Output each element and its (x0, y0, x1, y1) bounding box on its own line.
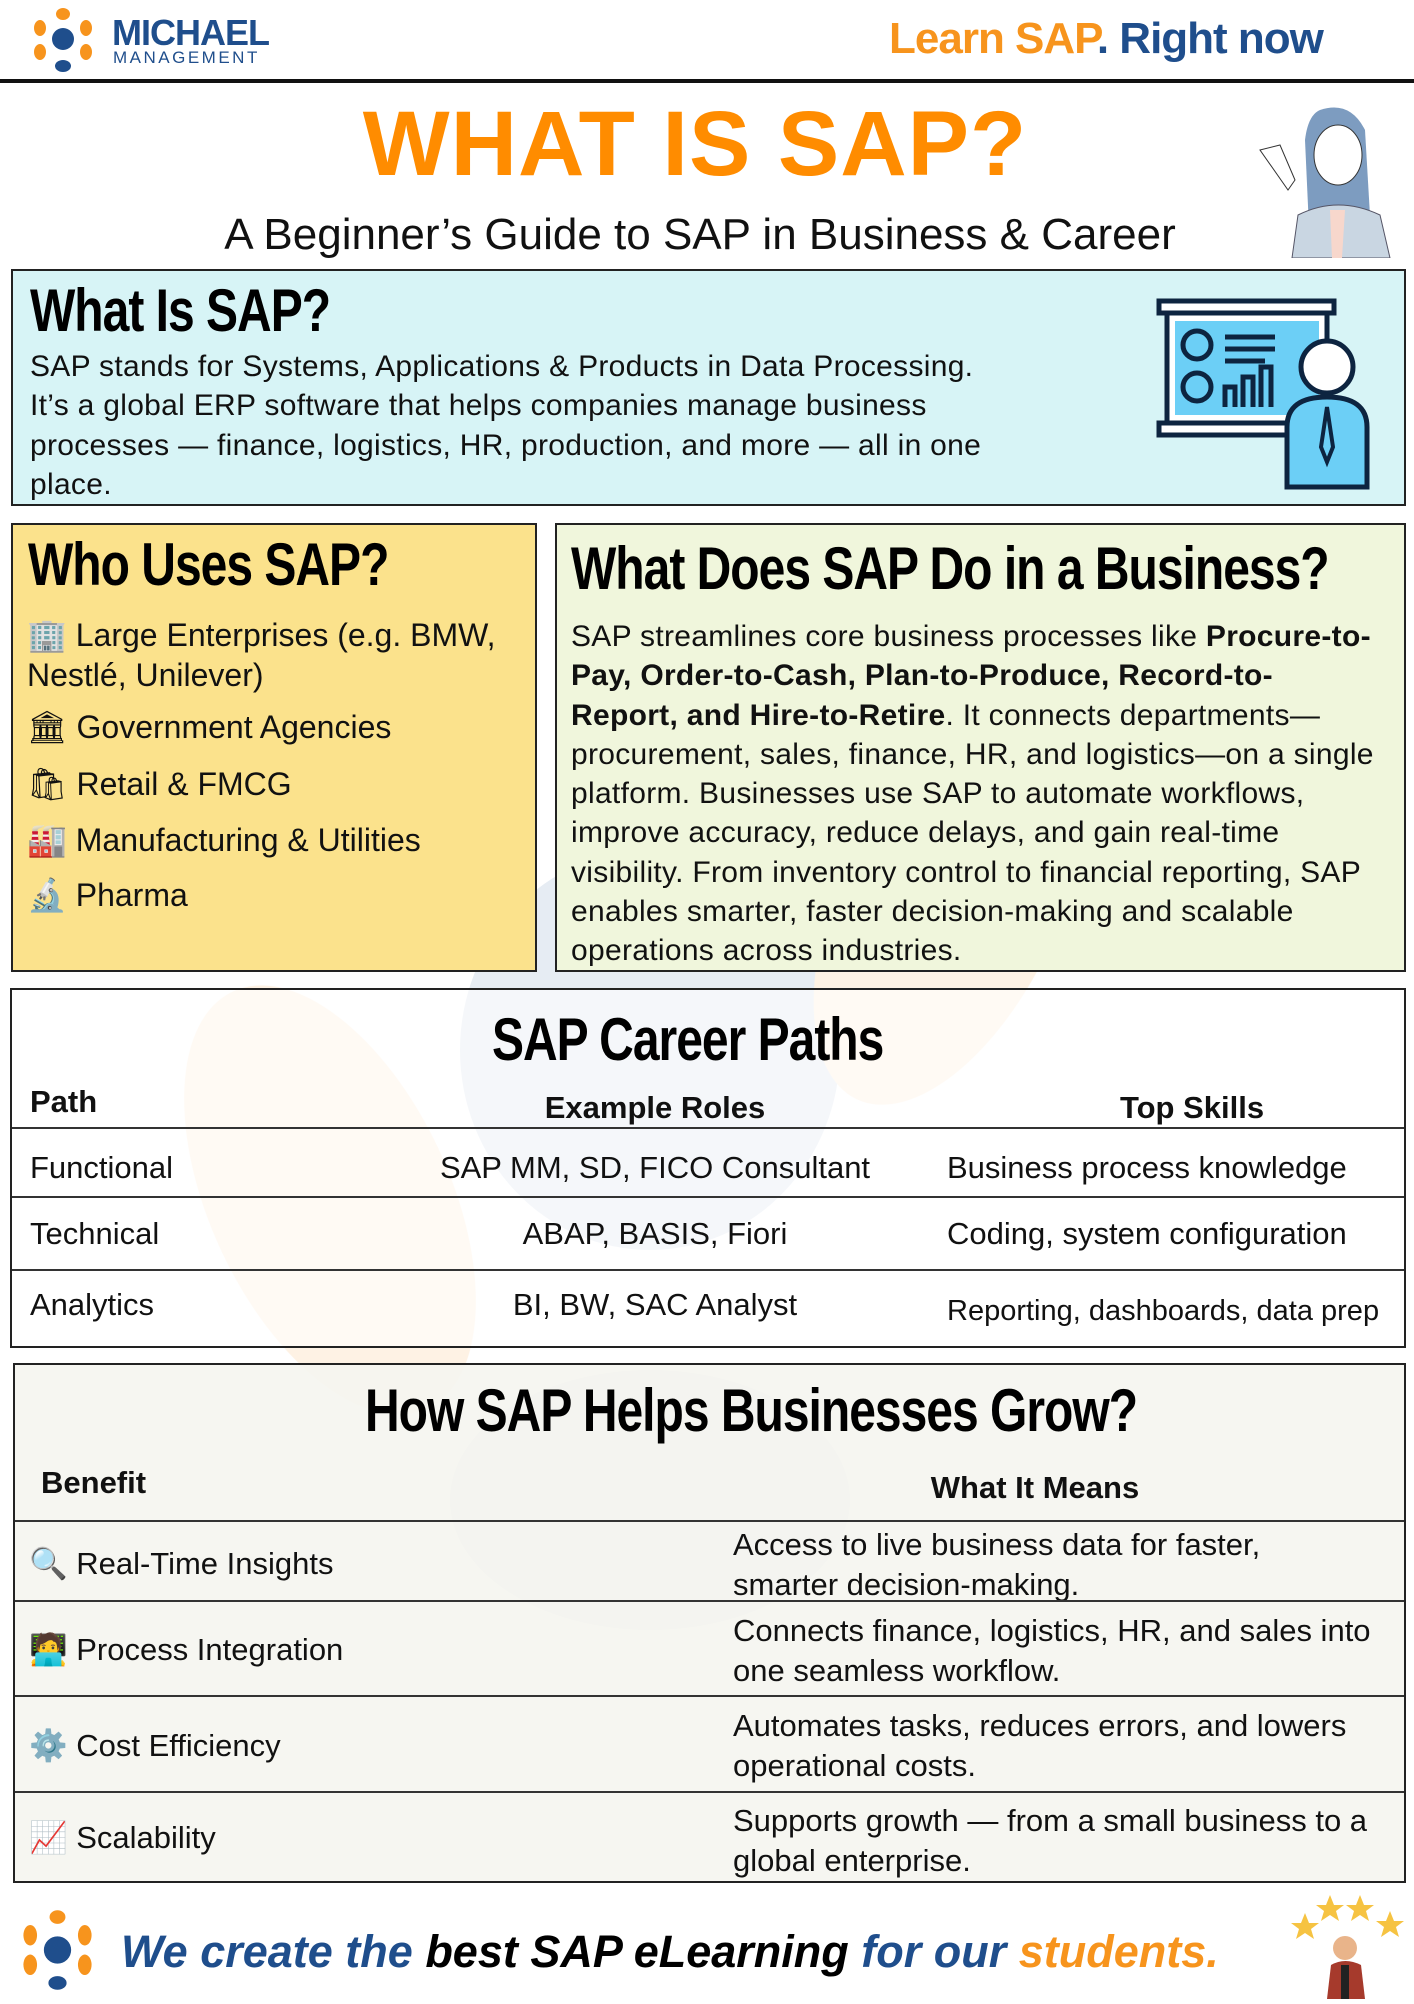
panel: career paths table: ABAP, BASIS, Fiori (523, 1216, 787, 1251)
panel: how SAP helps businesses grow: Automates tasks, reduces errors, and lowers (733, 1708, 1346, 1743)
row: process integration: 🧑‍💻 Process Integration (29, 1632, 343, 1667)
list: 🔬 Pharma (27, 877, 188, 913)
table header: Benefit (41, 1465, 146, 1500)
logo (34, 8, 269, 72)
list: 🛍 Retail & FMCG (27, 766, 292, 802)
panel: who uses SAP (11, 523, 537, 972)
title: WHAT IS SAP? (363, 93, 1027, 195)
table header: Path (30, 1084, 97, 1119)
text block: processes — finance, logistics, HR, production, and more — all in one (30, 429, 981, 462)
panel: career paths table: Example Roles (545, 1090, 765, 1125)
heading: How SAP Helps Businesses Grow? (365, 1378, 1137, 1444)
text block: operations across industries. (571, 934, 962, 967)
list: 🏢 Large Enterprises (e.g. BMW, (27, 617, 495, 653)
panel: how SAP helps businesses grow: smarter decision-making. (733, 1567, 1079, 1602)
panel: career paths table (10, 988, 1406, 1348)
illustration: woman (1259, 108, 1390, 258)
panel: how SAP helps businesses grow: operational costs. (733, 1748, 976, 1783)
list: 🏛 Government Agencies (27, 709, 391, 745)
heading: What Does SAP Do in a Business? (571, 536, 1329, 602)
heading: SAP Career Paths (492, 1007, 883, 1074)
text block: It’s a global ERP software that helps companies manage business (30, 389, 927, 422)
text block: Pay, Order-to-Cash, Plan-to-Produce, Record-to- (571, 659, 1273, 692)
text block: procurement, sales, finance, HR, and logistics—on a single (571, 738, 1374, 771)
text block (30, 350, 981, 501)
text block: visibility. From inventory control to financial reporting, SAP (571, 856, 1361, 889)
list: 🏭 Manufacturing & Utilities (27, 822, 421, 858)
panel: career paths table: Business process knowledge (947, 1150, 1347, 1185)
row: analytics: Analytics (30, 1287, 154, 1322)
list: Nestlé, Unilever) (27, 657, 264, 693)
panel: what does SAP do (555, 523, 1406, 972)
panel: career paths table: BI, BW, SAC Analyst (513, 1287, 797, 1322)
text block: platform. Businesses use SAP to automate workflows, (571, 777, 1304, 810)
row: real-time insights: 🔍 Real-Time Insights (29, 1546, 333, 1581)
logo: MICHAEL (112, 12, 269, 53)
panel: how SAP helps businesses grow: global enterprise. (733, 1843, 971, 1878)
tagline: Learn SAP. Right now (889, 14, 1323, 63)
footer logo (23, 1910, 92, 1990)
list (27, 617, 495, 913)
panel: how SAP helps businesses grow: What It Means (931, 1470, 1139, 1505)
panel: career paths table: SAP MM, SD, FICO Consultant (440, 1150, 870, 1185)
footer illustration: man with stars (1291, 1895, 1404, 1999)
footer slogan: We create the best SAP eLearning for our students. (121, 1926, 1219, 1977)
panel: how SAP helps businesses grow: Access to live business data for faster, (733, 1527, 1260, 1562)
panel: how SAP helps businesses grow: Connects finance, logistics, HR, and sales into (733, 1613, 1371, 1648)
text block: enables smarter, faster decision-making and scalable (571, 895, 1294, 928)
text block: SAP streamlines core business processes like Procure-to- (571, 620, 1371, 653)
panel: career paths table: Coding, system configuration (947, 1216, 1347, 1251)
heading: What Is SAP? (30, 278, 330, 344)
subtitle: A Beginner’s Guide to SAP in Business & Career (224, 210, 1176, 259)
panel: how SAP helps businesses grow: one seamless workflow. (733, 1653, 1060, 1688)
row: scalability: 📈 Scalability (29, 1820, 216, 1855)
row: functional: Functional (30, 1150, 173, 1185)
heading: Who Uses SAP? (28, 532, 388, 598)
panel: career paths table: Top Skills (1120, 1090, 1264, 1125)
text block (571, 620, 1374, 967)
row: technical: Technical (30, 1216, 159, 1251)
row: cost efficiency: ⚙️ Cost Efficiency (29, 1728, 281, 1763)
text block: Report, and Hire-to-Retire. It connects departments— (571, 699, 1320, 732)
text block: improve accuracy, reduce delays, and gain real-time (571, 816, 1279, 849)
logo: MANAGEMENT (113, 48, 260, 67)
panel: career paths table: Reporting, dashboards, data prep (947, 1295, 1379, 1327)
panel: how SAP helps businesses grow: Supports growth — from a small business to a (733, 1803, 1367, 1838)
panel: what is SAP (11, 269, 1406, 506)
panel: how SAP helps businesses grow (13, 1363, 1406, 1883)
text block: SAP stands for Systems, Applications & Products in Data Processing. (30, 350, 973, 383)
icon: presentation (1156, 298, 1370, 490)
text block: place. (30, 468, 112, 501)
